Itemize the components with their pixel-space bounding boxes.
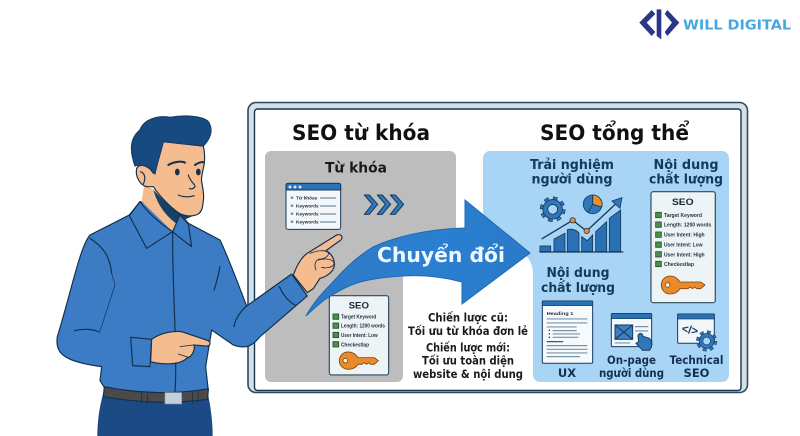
On-page window icon [611, 314, 652, 350]
keyword browser window: Keywords [296, 203, 319, 209]
labels under icons: SEO [684, 366, 710, 380]
subheading: Nội dung chất lượng (bottom): Nội dung [546, 265, 610, 281]
icon: orange key [661, 276, 705, 294]
subheading: Nội dung chất lượng (top) [649, 157, 723, 188]
SEO checklist card (keyword): Length: 1200 words [341, 324, 385, 330]
keyword browser window: Keywords [296, 211, 319, 217]
head [131, 116, 211, 216]
arrow: Chuyển đổi [306, 200, 530, 316]
labels under icons [558, 353, 724, 380]
logo: Will Digital: WILL DIGITAL [683, 18, 791, 34]
SEO checklist card (holistic) [651, 192, 715, 303]
arrow: Chuyển đổi: Chuyển đổi [377, 242, 505, 267]
SEO checklist card (keyword): Target Keyword [341, 315, 376, 321]
pointing hand [293, 235, 342, 293]
collar [129, 202, 173, 248]
face [136, 142, 205, 216]
text block: strategy comparison [408, 310, 528, 381]
text block: strategy comparison: Tối ưu toàn diện [422, 354, 514, 368]
facial features [168, 162, 204, 165]
heading: SEO từ khóa: SEO từ khóa [292, 121, 430, 146]
neck shadow [153, 190, 197, 225]
SEO checklist card (keyword): SEO [349, 300, 369, 310]
shirt details [74, 232, 295, 392]
bars [540, 210, 621, 252]
SEO checklist card (holistic): Target Keyword [664, 213, 702, 219]
labels under icons: Technical [670, 353, 724, 367]
SEO checklist card (keyword) [329, 296, 389, 375]
text block: strategy comparison: Chiến lược cũ: [428, 310, 508, 324]
subheading: Nội dung chất lượng (top): Nội dung [654, 157, 718, 173]
SEO checklist card (holistic): User Intent: High [664, 233, 705, 239]
Technical SEO window icon [678, 314, 715, 350]
subheading: Trải nghiệm người dùng: Trải nghiệm [530, 157, 614, 173]
person presenter [57, 116, 342, 436]
left arm cuff and hand [131, 337, 152, 367]
chart: growth bars with gear and pie [539, 195, 623, 252]
icon: triple chevrons [364, 195, 404, 214]
SEO checklist card (holistic): User Intent: High [664, 252, 705, 258]
shirt [57, 202, 307, 393]
icon: gear [542, 199, 563, 220]
icon: orange key [339, 352, 378, 369]
panel: keyword SEO background [265, 151, 456, 382]
Technical SEO window icon: </> [681, 323, 699, 338]
presentation board frame [248, 102, 748, 392]
text block: strategy comparison: Chiến lược mới: [426, 340, 510, 354]
heading: SEO tổng thể: SEO tổng thể [540, 120, 689, 146]
trend line [542, 198, 622, 239]
SEO checklist card (holistic): Checkestlap [664, 262, 695, 268]
labels under icons: người dùng [599, 366, 664, 380]
UX document icon [542, 301, 593, 363]
subheading: Nội dung chất lượng (bottom): chất lượng [541, 279, 615, 296]
belt [103, 387, 208, 402]
subheading: Nội dung chất lượng (bottom) [541, 265, 615, 296]
neck [142, 185, 197, 232]
keyword browser window: Keywords [296, 219, 319, 225]
keyword browser window: Từ khóas [296, 195, 318, 201]
text block: strategy comparison: Tối ưu từ khóa đơn lẻ [408, 324, 528, 338]
subheading: Nội dung chất lượng (top): chất lượng [649, 170, 723, 188]
panel: holistic SEO background [483, 151, 729, 382]
hair [131, 116, 211, 174]
SEO checklist card (holistic): SEO [672, 197, 694, 207]
subheading: Trải nghiệm người dùng: người dùng [532, 172, 612, 188]
SEO checklist card (holistic): User Intent: Low [664, 243, 703, 249]
icon: pie chart [583, 195, 602, 214]
UX document icon: Heading 1 [547, 311, 574, 317]
subheading: Từ khóa: Từ khóa [325, 160, 387, 176]
SEO checklist card (holistic): Length: 1200 words [664, 223, 711, 229]
text block: strategy comparison: website & nội dung [413, 367, 523, 381]
trousers [97, 393, 213, 436]
labels under icons: On-page [607, 353, 656, 367]
icon: gear [698, 332, 715, 350]
subheading: Trải nghiệm người dùng [530, 157, 614, 188]
labels under icons: UX [558, 366, 576, 380]
logo: Will Digital [639, 9, 791, 39]
SEO checklist card (keyword): User Intent: Low [341, 333, 378, 339]
SEO checklist card (keyword): Checkestlap [341, 342, 370, 348]
keyword browser window [286, 183, 341, 229]
